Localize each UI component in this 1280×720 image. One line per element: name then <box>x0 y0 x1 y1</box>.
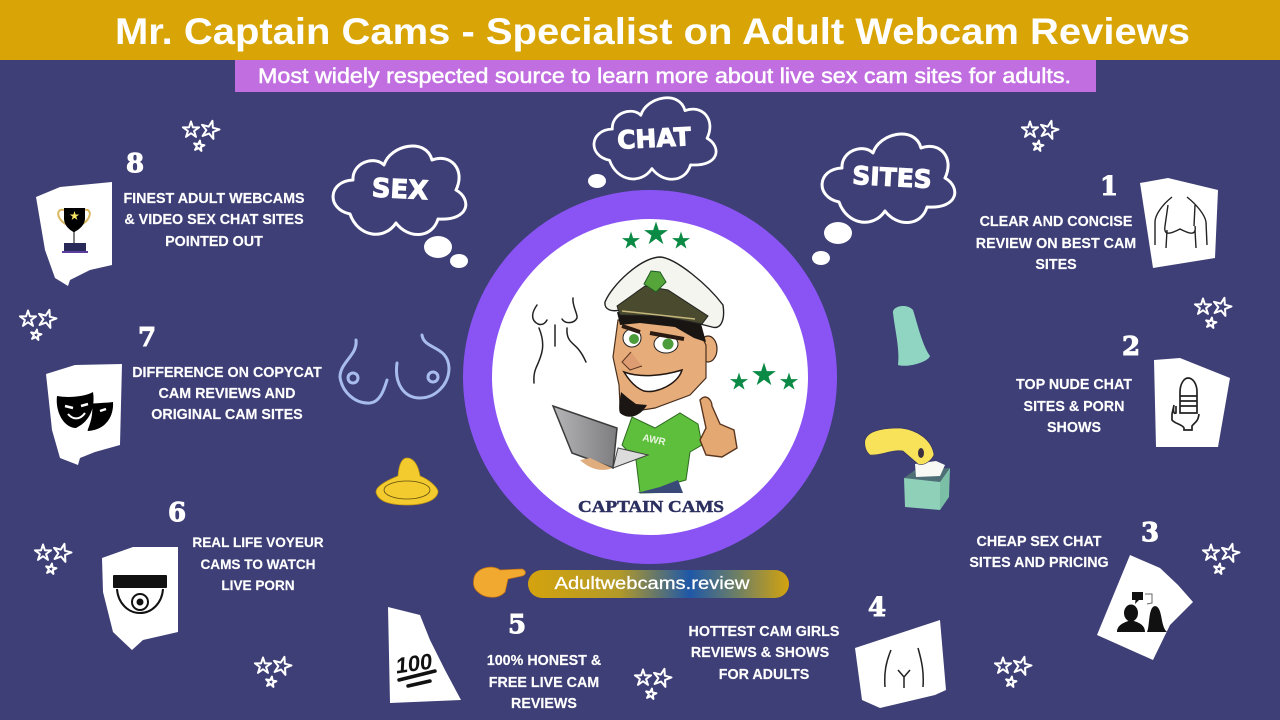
item 8 <box>36 149 305 286</box>
item 7: DIFFERENCE ON COPYCAT <box>132 365 322 381</box>
character: captain with laptop <box>553 257 737 493</box>
item 1: 1 <box>1100 172 1118 202</box>
face <box>613 320 706 412</box>
item 4 <box>689 593 946 708</box>
icon: tissue box with hand <box>865 428 950 510</box>
item 6: LIVE PORN <box>221 578 295 593</box>
hat <box>605 257 724 327</box>
character: captain with laptop: AWR <box>641 433 667 448</box>
icon: mint shape <box>893 306 930 366</box>
item 3: CHEAP SEX CHAT <box>976 534 1102 550</box>
link pill with pointing hand <box>473 567 789 598</box>
thought cloud: sex <box>333 146 468 268</box>
item 2: TOP NUDE CHAT <box>1016 377 1132 393</box>
item 8: FINEST ADULT WEBCAMS <box>123 191 305 207</box>
smile <box>624 370 682 392</box>
item 6: 6 <box>168 498 186 528</box>
badge caption: CAPTAIN CAMS <box>578 497 724 516</box>
icon: pointing hand <box>473 567 525 597</box>
item 2 <box>1016 332 1230 447</box>
beard <box>619 392 647 417</box>
item 5: 5 <box>508 610 526 640</box>
item 5: 100 <box>394 648 434 678</box>
decorative star clusters <box>20 118 1241 699</box>
item 2: SHOWS <box>1047 420 1101 436</box>
hat badge <box>644 271 666 292</box>
thumbs up hand <box>700 397 737 457</box>
thought cloud: sites: SITES <box>852 161 932 194</box>
item 1: SITES <box>1035 257 1077 273</box>
subtitle banner: Most widely respected source to learn more about live sex cam sites for adults. <box>258 65 1071 88</box>
item 7 <box>46 323 322 465</box>
item 6: CAMS TO WATCH <box>200 557 316 572</box>
item 2: 2 <box>1122 332 1140 362</box>
item 6 <box>102 498 324 650</box>
item 1: CLEAR AND CONCISE <box>980 214 1132 230</box>
item 4: FOR ADULTS <box>719 667 809 683</box>
item 1: REVIEW ON BEST CAM <box>976 236 1136 252</box>
laptop <box>553 406 617 468</box>
icon: outline curves left of badge <box>340 335 449 403</box>
item 2: SITES & PORN <box>1024 399 1124 415</box>
central badge <box>463 190 837 564</box>
item 7: 7 <box>138 323 156 353</box>
thought cloud: sex: SEX <box>371 174 429 206</box>
item 3: SITES AND PRICING <box>969 555 1109 571</box>
shirt <box>622 413 702 493</box>
nose <box>622 352 642 370</box>
stars right <box>730 362 798 390</box>
stars top <box>622 222 690 249</box>
hair <box>617 312 706 342</box>
ear <box>699 336 717 362</box>
subtitle banner <box>235 60 1096 92</box>
item 4: HOTTEST CAM GIRLS <box>689 624 839 640</box>
header banner <box>0 0 1280 60</box>
item 5: 100% HONEST & <box>487 653 601 669</box>
item 8: POINTED OUT <box>165 234 263 250</box>
item 5: REVIEWS <box>511 696 577 712</box>
item 8: & VIDEO SEX CHAT SITES <box>124 212 304 228</box>
item 6: REAL LIFE VOYEUR <box>192 535 324 550</box>
item 7: ORIGINAL CAM SITES <box>151 407 303 423</box>
item 4: REVIEWS & SHOWS <box>691 645 829 661</box>
item 3 <box>969 518 1193 660</box>
item 3: 3 <box>1141 518 1159 548</box>
item 7: CAM REVIEWS AND <box>159 386 295 402</box>
item 1 <box>976 172 1218 273</box>
thought cloud: sites <box>812 134 955 265</box>
item 4: 4 <box>868 593 886 623</box>
icon: gold dome <box>376 458 438 505</box>
item 8: 8 <box>126 149 144 179</box>
header banner: Mr. Captain Cams - Specialist on Adult Webcam Reviews <box>115 11 1190 52</box>
line art figure <box>533 298 586 383</box>
item 5 <box>388 607 601 712</box>
thought cloud: chat: CHAT <box>616 122 692 155</box>
item 5: FREE LIVE CAM <box>489 675 599 691</box>
thought cloud: chat <box>588 98 716 188</box>
link pill with pointing hand: Adultwebcams.review <box>554 573 750 593</box>
eyes <box>623 329 641 347</box>
